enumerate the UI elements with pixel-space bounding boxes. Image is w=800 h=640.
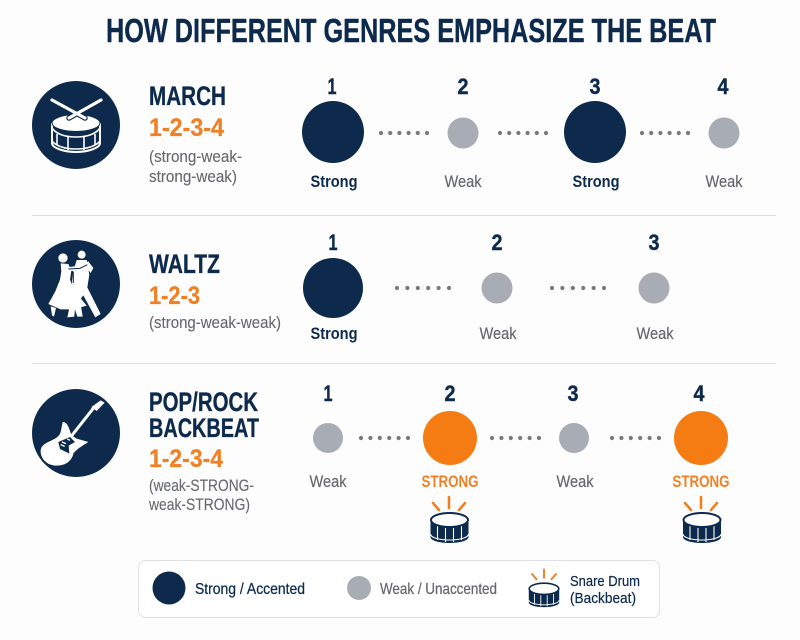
beat chart: waltz bbox=[303, 230, 674, 343]
beat chart: waltz: Weak bbox=[480, 324, 517, 343]
divider bbox=[32, 215, 776, 216]
heading: march: MARCH bbox=[149, 81, 226, 111]
beat chart: pop/rock: STRONG bbox=[672, 472, 730, 491]
beat chart: waltz: 3 bbox=[648, 230, 660, 255]
beat chart: pop/rock: 4 bbox=[694, 381, 705, 406]
beat chart: pop/rock: Weak bbox=[556, 472, 594, 491]
description: pop/rock: weak-STRONG) bbox=[148, 495, 250, 514]
icon: waltz dancers bbox=[32, 240, 120, 328]
beat chart: march: 4 bbox=[718, 74, 729, 99]
panel: pop/rock backbeat bbox=[32, 381, 730, 543]
beat chart: march: Weak bbox=[444, 172, 482, 191]
beat chart: waltz: Strong bbox=[310, 324, 358, 343]
heading: pop/rock backbeat: POP/ROCK bbox=[149, 387, 258, 417]
panel: waltz bbox=[32, 230, 674, 343]
count: waltz: 1-2-3 bbox=[149, 282, 200, 310]
description: march: (strong-weak- bbox=[149, 147, 242, 166]
legend: strong: Strong / Accented bbox=[195, 581, 305, 598]
icon: snare drum on beat 2 bbox=[430, 497, 468, 543]
legend bbox=[138, 560, 660, 618]
beat chart: pop/rock: Weak bbox=[310, 472, 347, 491]
heading: waltz: WALTZ bbox=[149, 249, 220, 279]
beat chart: pop/rock: STRONG bbox=[422, 472, 478, 491]
beat chart: march: 3 bbox=[590, 74, 600, 99]
divider bbox=[32, 363, 776, 364]
legend: weak: Weak / Unaccented bbox=[380, 581, 497, 598]
legend: snare drum: Snare Drum bbox=[570, 573, 640, 590]
beat chart: waltz: Weak bbox=[636, 324, 674, 343]
beat chart: march: Strong bbox=[572, 172, 620, 191]
heading: pop/rock backbeat: BACKBEAT bbox=[149, 413, 259, 443]
description: march: strong-weak) bbox=[149, 167, 237, 186]
icon: snare drum with crossed sticks bbox=[32, 81, 120, 169]
description: pop/rock: (weak-STRONG- bbox=[149, 476, 254, 495]
count: march: 1-2-3-4 bbox=[149, 114, 224, 142]
beat chart: march: 2 bbox=[458, 74, 468, 99]
beat chart: waltz: 1 bbox=[328, 230, 338, 255]
legend: snare drum: (Backbeat) bbox=[570, 590, 636, 607]
beat chart: waltz: 2 bbox=[492, 230, 502, 255]
beat chart: pop/rock: 1 bbox=[324, 381, 332, 406]
description: waltz: (strong-weak-weak) bbox=[149, 313, 281, 332]
beat chart: march: Strong bbox=[310, 172, 358, 191]
legend: snare drum bbox=[529, 570, 640, 607]
beat chart: pop/rock bbox=[310, 381, 730, 491]
icon: electric guitar bbox=[32, 389, 120, 477]
beat chart: pop/rock: 2 bbox=[444, 381, 456, 406]
count: pop/rock: 1-2-3-4 bbox=[149, 445, 223, 473]
beat chart: march bbox=[302, 74, 743, 191]
legend: strong bbox=[152, 572, 305, 604]
icon: snare drum on beat 4 bbox=[683, 497, 721, 543]
beat chart: march: 1 bbox=[328, 74, 336, 99]
beat chart: pop/rock: 3 bbox=[568, 381, 578, 406]
legend: weak bbox=[347, 576, 497, 600]
beat chart: march: Weak bbox=[706, 172, 743, 191]
panel: march bbox=[32, 74, 743, 191]
